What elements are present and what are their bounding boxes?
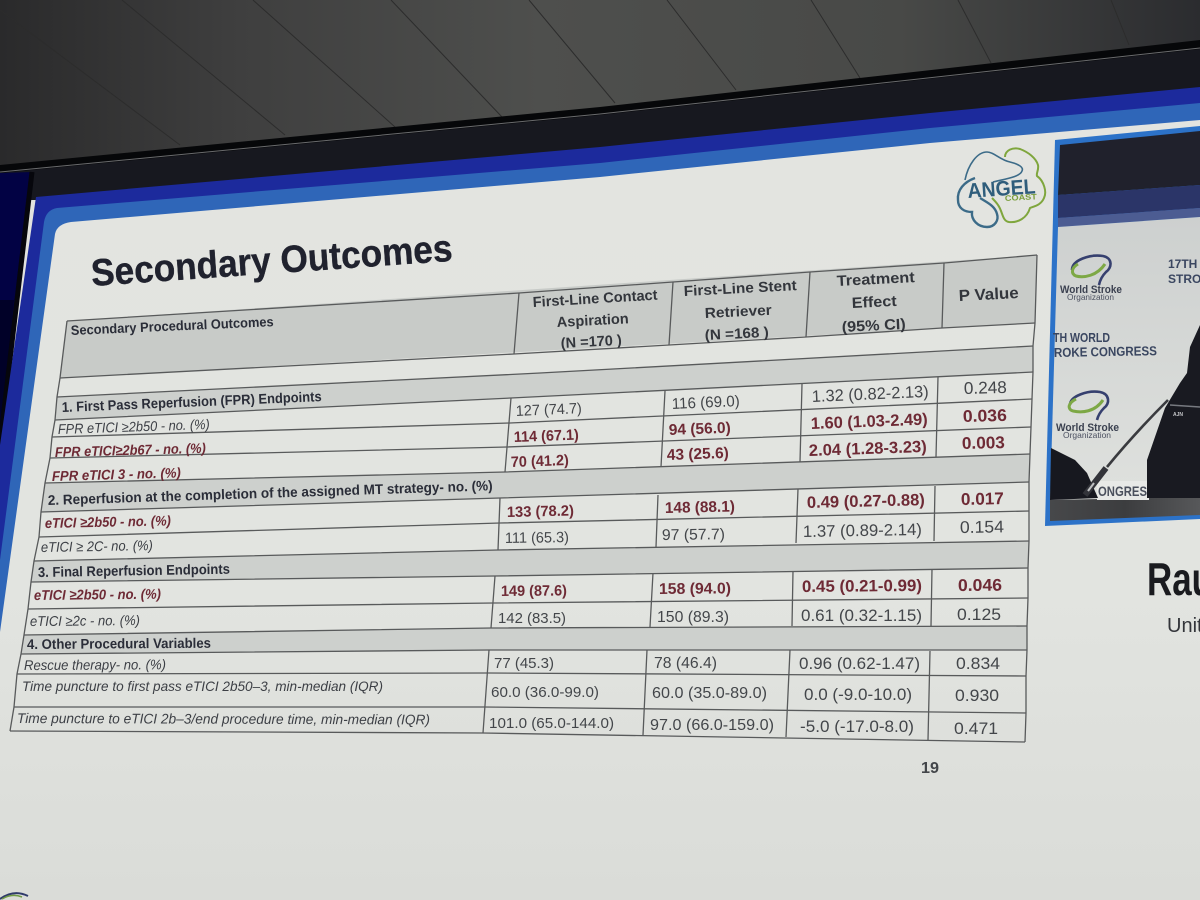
header labels: Treatment xyxy=(836,269,915,290)
FPR row values: 0.036 xyxy=(963,406,1007,426)
final reperfusion row values: 0.61 (0.32-1.15) xyxy=(801,607,922,625)
first column labels: Time puncture to first pass eTICI 2b50–3, min-median (IQR) xyxy=(22,678,383,694)
FPR row values: 94 (56.0) xyxy=(669,420,731,439)
backdrop: second World Stroke logo xyxy=(1056,392,1119,440)
header labels: First-Line Stent xyxy=(683,278,797,300)
microphone xyxy=(1085,400,1168,495)
ceiling background xyxy=(0,0,1200,200)
backdrop: first World Stroke logo: World Stroke xyxy=(1060,284,1122,296)
backdrop: congress title left: TH WORLD xyxy=(1053,330,1110,345)
speaker silhouette xyxy=(1147,325,1200,498)
other procedural variables row values: 0.930 xyxy=(955,686,999,705)
left navy side screen xyxy=(0,172,32,445)
final reperfusion row values: 0.046 xyxy=(958,576,1002,595)
logo: ANGEL COAST xyxy=(958,148,1045,227)
section band 2 xyxy=(41,454,1030,512)
backdrop: first World Stroke logo xyxy=(1060,256,1122,302)
backdrop: congress title top right xyxy=(1168,257,1200,286)
completion reperfusion row values xyxy=(505,489,1004,547)
table grid lines xyxy=(10,255,1037,742)
FPR row values: 0.003 xyxy=(962,433,1005,453)
header labels: Retriever xyxy=(704,303,772,322)
first column labels: eTICI ≥2b50 - no. (%) xyxy=(34,586,161,603)
header labels: (N =168 ) xyxy=(704,325,769,344)
speaker silhouette: AJN xyxy=(1173,412,1183,418)
table xyxy=(10,255,1037,742)
first column labels: Rescue therapy- no. (%) xyxy=(24,656,166,673)
backdrop: first World Stroke logo: Organization xyxy=(1067,292,1114,302)
other procedural variables row values: 0.0 (-9.0-10.0) xyxy=(804,686,912,704)
final reperfusion row values: 0.45 (0.21-0.99) xyxy=(802,577,922,596)
first column labels xyxy=(17,388,493,727)
first column labels: 3. Final Reperfusion Endpoints xyxy=(38,561,230,580)
logo: ANGEL COAST: COAST xyxy=(1005,192,1037,203)
backdrop: congress title left xyxy=(1053,330,1157,360)
other procedural variables row values: -5.0 (-17.0-8.0) xyxy=(800,718,914,736)
completion reperfusion row values: 0.49 (0.27-0.88) xyxy=(807,491,925,512)
final reperfusion row values: 0.125 xyxy=(957,605,1001,624)
person at left edge xyxy=(1050,448,1098,500)
completion reperfusion row values: 148 (88.1) xyxy=(665,498,735,517)
completion reperfusion row values: 0.017 xyxy=(961,489,1004,509)
header labels: P Value xyxy=(958,285,1019,305)
FPR row values: 2.04 (1.28-3.23) xyxy=(809,438,927,460)
section band 1 xyxy=(55,346,1033,420)
first column labels: 2. Reperfusion at the completion of the assigned MT strategy- no. (%) xyxy=(48,477,493,508)
backdrop: congress title left: ROKE CONGRESS xyxy=(1054,343,1157,360)
first column labels: 1. First Pass Reperfusion (FPR) Endpoints xyxy=(61,388,322,415)
header labels: (N =170 ) xyxy=(560,333,622,352)
FPR row values xyxy=(511,378,1007,471)
FPR row values: 0.248 xyxy=(964,378,1007,398)
backdrop: second World Stroke logo: Organization xyxy=(1063,430,1111,440)
header labels: Effect xyxy=(851,293,897,312)
first column labels: FPR eTICI 3 - no. (%) xyxy=(52,464,181,484)
completion reperfusion row values: 111 (65.3) xyxy=(505,529,569,547)
first column labels: eTICI ≥2c - no. (%) xyxy=(30,612,140,629)
table header fill xyxy=(60,255,1037,378)
FPR row values: 114 (67.1) xyxy=(514,427,579,446)
first column labels: FPR eTICI≥2b67 - no. (%) xyxy=(55,440,206,460)
header labels xyxy=(70,269,1019,352)
first column labels: Time puncture to eTICI 2b–3/end procedure time, min-median (IQR) xyxy=(17,710,430,727)
final reperfusion row values: 158 (94.0) xyxy=(659,580,731,598)
final reperfusion row values xyxy=(498,576,1002,627)
other procedural variables row values xyxy=(489,654,1000,738)
first column labels: 4. Other Procedural Variables xyxy=(27,635,211,652)
header labels: Secondary Procedural Outcomes xyxy=(70,314,274,338)
FPR row values: 70 (41.2) xyxy=(511,452,569,471)
FPR row values: 1.60 (1.03-2.49) xyxy=(810,411,928,433)
other procedural variables row values: 60.0 (36.0-99.0) xyxy=(491,684,599,701)
header labels: Aspiration xyxy=(556,311,629,331)
section band 4 xyxy=(21,626,1027,654)
slide title: Secondary Outcomes xyxy=(90,228,454,295)
header labels: (95% CI) xyxy=(841,316,906,336)
other procedural variables row values: 0.471 xyxy=(954,719,998,738)
FPR row values: 43 (25.6) xyxy=(667,445,729,464)
logo: ANGEL COAST: ANGEL xyxy=(967,175,1036,203)
other procedural variables row values: 78 (46.4) xyxy=(654,655,717,672)
header labels: First-Line Contact xyxy=(532,288,658,311)
other procedural variables row values: 97.0 (66.0-159.0) xyxy=(650,717,774,734)
bottom-left logo fragment xyxy=(0,893,28,899)
final reperfusion row values: 149 (87.6) xyxy=(501,582,567,600)
first column labels: FPR eTICI ≥2b50 - no. (%) xyxy=(58,416,210,437)
FPR row values: 116 (69.0) xyxy=(671,393,740,413)
completion reperfusion row values: 0.154 xyxy=(960,517,1004,537)
backdrop: second World Stroke logo: World Stroke xyxy=(1056,422,1119,434)
final reperfusion row values: 150 (89.3) xyxy=(657,609,729,626)
other procedural variables row values: 60.0 (35.0-89.0) xyxy=(652,685,767,702)
backdrop: congress label bottom: ONGRES xyxy=(1098,483,1147,499)
other procedural variables row values: 0.96 (0.62-1.47) xyxy=(799,655,920,673)
FPR row values: 127 (74.7) xyxy=(515,400,582,420)
first column labels: eTICI ≥2b50 - no. (%) xyxy=(45,512,171,531)
other procedural variables row values: 101.0 (65.0-144.0) xyxy=(489,715,614,732)
other procedural variables row values: 77 (45.3) xyxy=(494,655,554,672)
final reperfusion row values: 142 (83.5) xyxy=(498,610,566,627)
completion reperfusion row values: 133 (78.2) xyxy=(507,502,574,521)
completion reperfusion row values: 1.37 (0.89-2.14) xyxy=(803,521,922,541)
first column labels: eTICI ≥ 2C- no. (%) xyxy=(41,537,153,555)
speaker video frame xyxy=(1045,126,1200,526)
completion reperfusion row values: 97 (57.7) xyxy=(662,526,725,544)
FPR row values: 1.32 (0.82-2.13) xyxy=(811,383,929,406)
other procedural variables row values: 0.834 xyxy=(956,654,1000,673)
screen bezel xyxy=(0,40,1200,200)
page number: 19 xyxy=(921,760,939,777)
section band 3 xyxy=(31,541,1029,582)
